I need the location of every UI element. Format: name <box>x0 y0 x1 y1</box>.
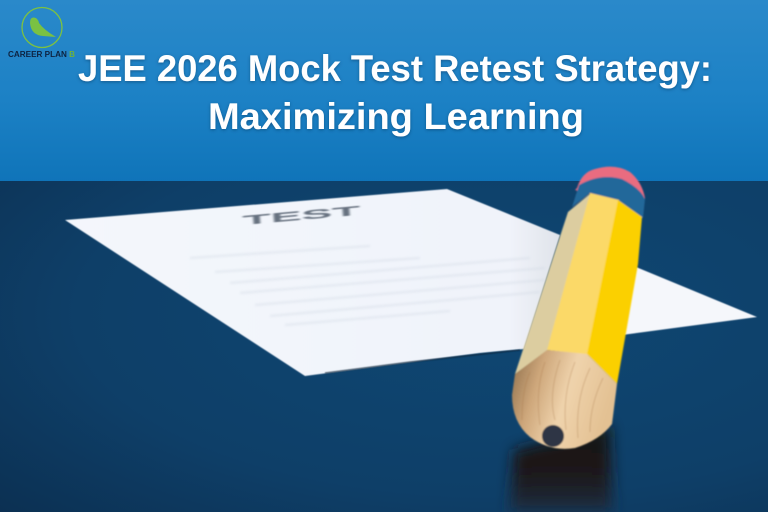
paper sheet left part <box>65 189 560 376</box>
heading on paper: TEST <box>242 203 362 228</box>
paper test sheet <box>65 189 757 376</box>
title <box>78 48 712 137</box>
icon: bird <box>30 17 56 37</box>
wood grain <box>522 360 603 438</box>
paper sheet right corner <box>622 267 757 335</box>
pencil left facet <box>515 193 591 374</box>
pencil eraser <box>575 167 645 205</box>
logo <box>8 8 75 59</box>
title line 1: JEE 2026 Mock Test Retest Strategy: <box>78 48 712 89</box>
pencil bright facet <box>587 200 642 384</box>
pencil wood tip <box>512 350 617 449</box>
pencil lead <box>542 425 564 447</box>
paper shadow edge <box>325 350 520 373</box>
pencil <box>512 167 645 449</box>
logo wordmark: CAREER PLAN B <box>8 50 75 59</box>
logo ring <box>22 8 62 48</box>
title line 2: Maximizing Learning <box>208 96 584 137</box>
pencil ferrule <box>572 177 645 218</box>
background wall <box>0 0 768 182</box>
table surface <box>0 181 768 512</box>
pencil reflection <box>510 425 612 512</box>
pencil middle facet <box>547 193 619 355</box>
blurred paper text lines <box>190 246 545 325</box>
